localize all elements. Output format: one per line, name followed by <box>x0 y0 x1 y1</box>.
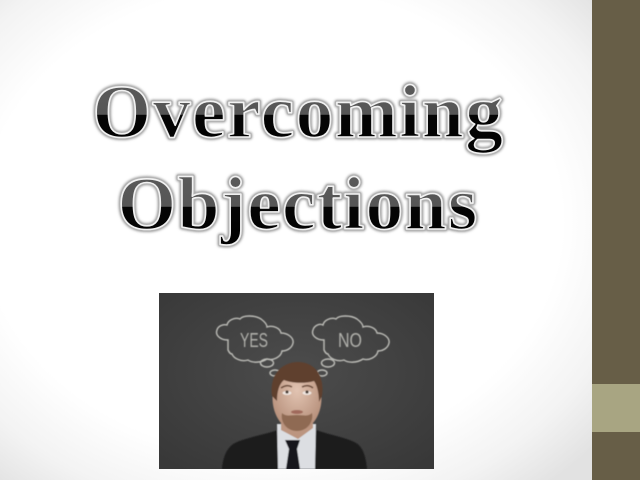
neck <box>280 423 314 440</box>
hair <box>272 362 322 402</box>
mouth <box>291 410 303 414</box>
eyes <box>282 391 292 395</box>
title line 2: Objections <box>117 163 479 246</box>
no label: NO <box>338 330 362 352</box>
thought cloud: no <box>313 316 389 376</box>
tie <box>285 440 300 469</box>
title line 1: Overcoming <box>92 71 505 154</box>
thought cloud: yes <box>217 316 293 376</box>
title line 1: Overcoming <box>92 71 505 154</box>
beard <box>282 413 312 431</box>
yes label: YES <box>240 330 268 352</box>
title <box>92 71 505 246</box>
head <box>272 380 322 423</box>
title line 2: Objections <box>117 163 479 246</box>
sidebar accent band <box>592 384 640 432</box>
eyebrows <box>281 386 313 388</box>
title line 2: Objections <box>117 163 479 246</box>
shirt <box>277 424 316 469</box>
photo: man with yes and no thought clouds <box>159 293 434 469</box>
man <box>222 362 367 469</box>
suit <box>222 430 367 469</box>
sidebar <box>592 0 640 480</box>
title line 1: Overcoming <box>92 71 505 154</box>
